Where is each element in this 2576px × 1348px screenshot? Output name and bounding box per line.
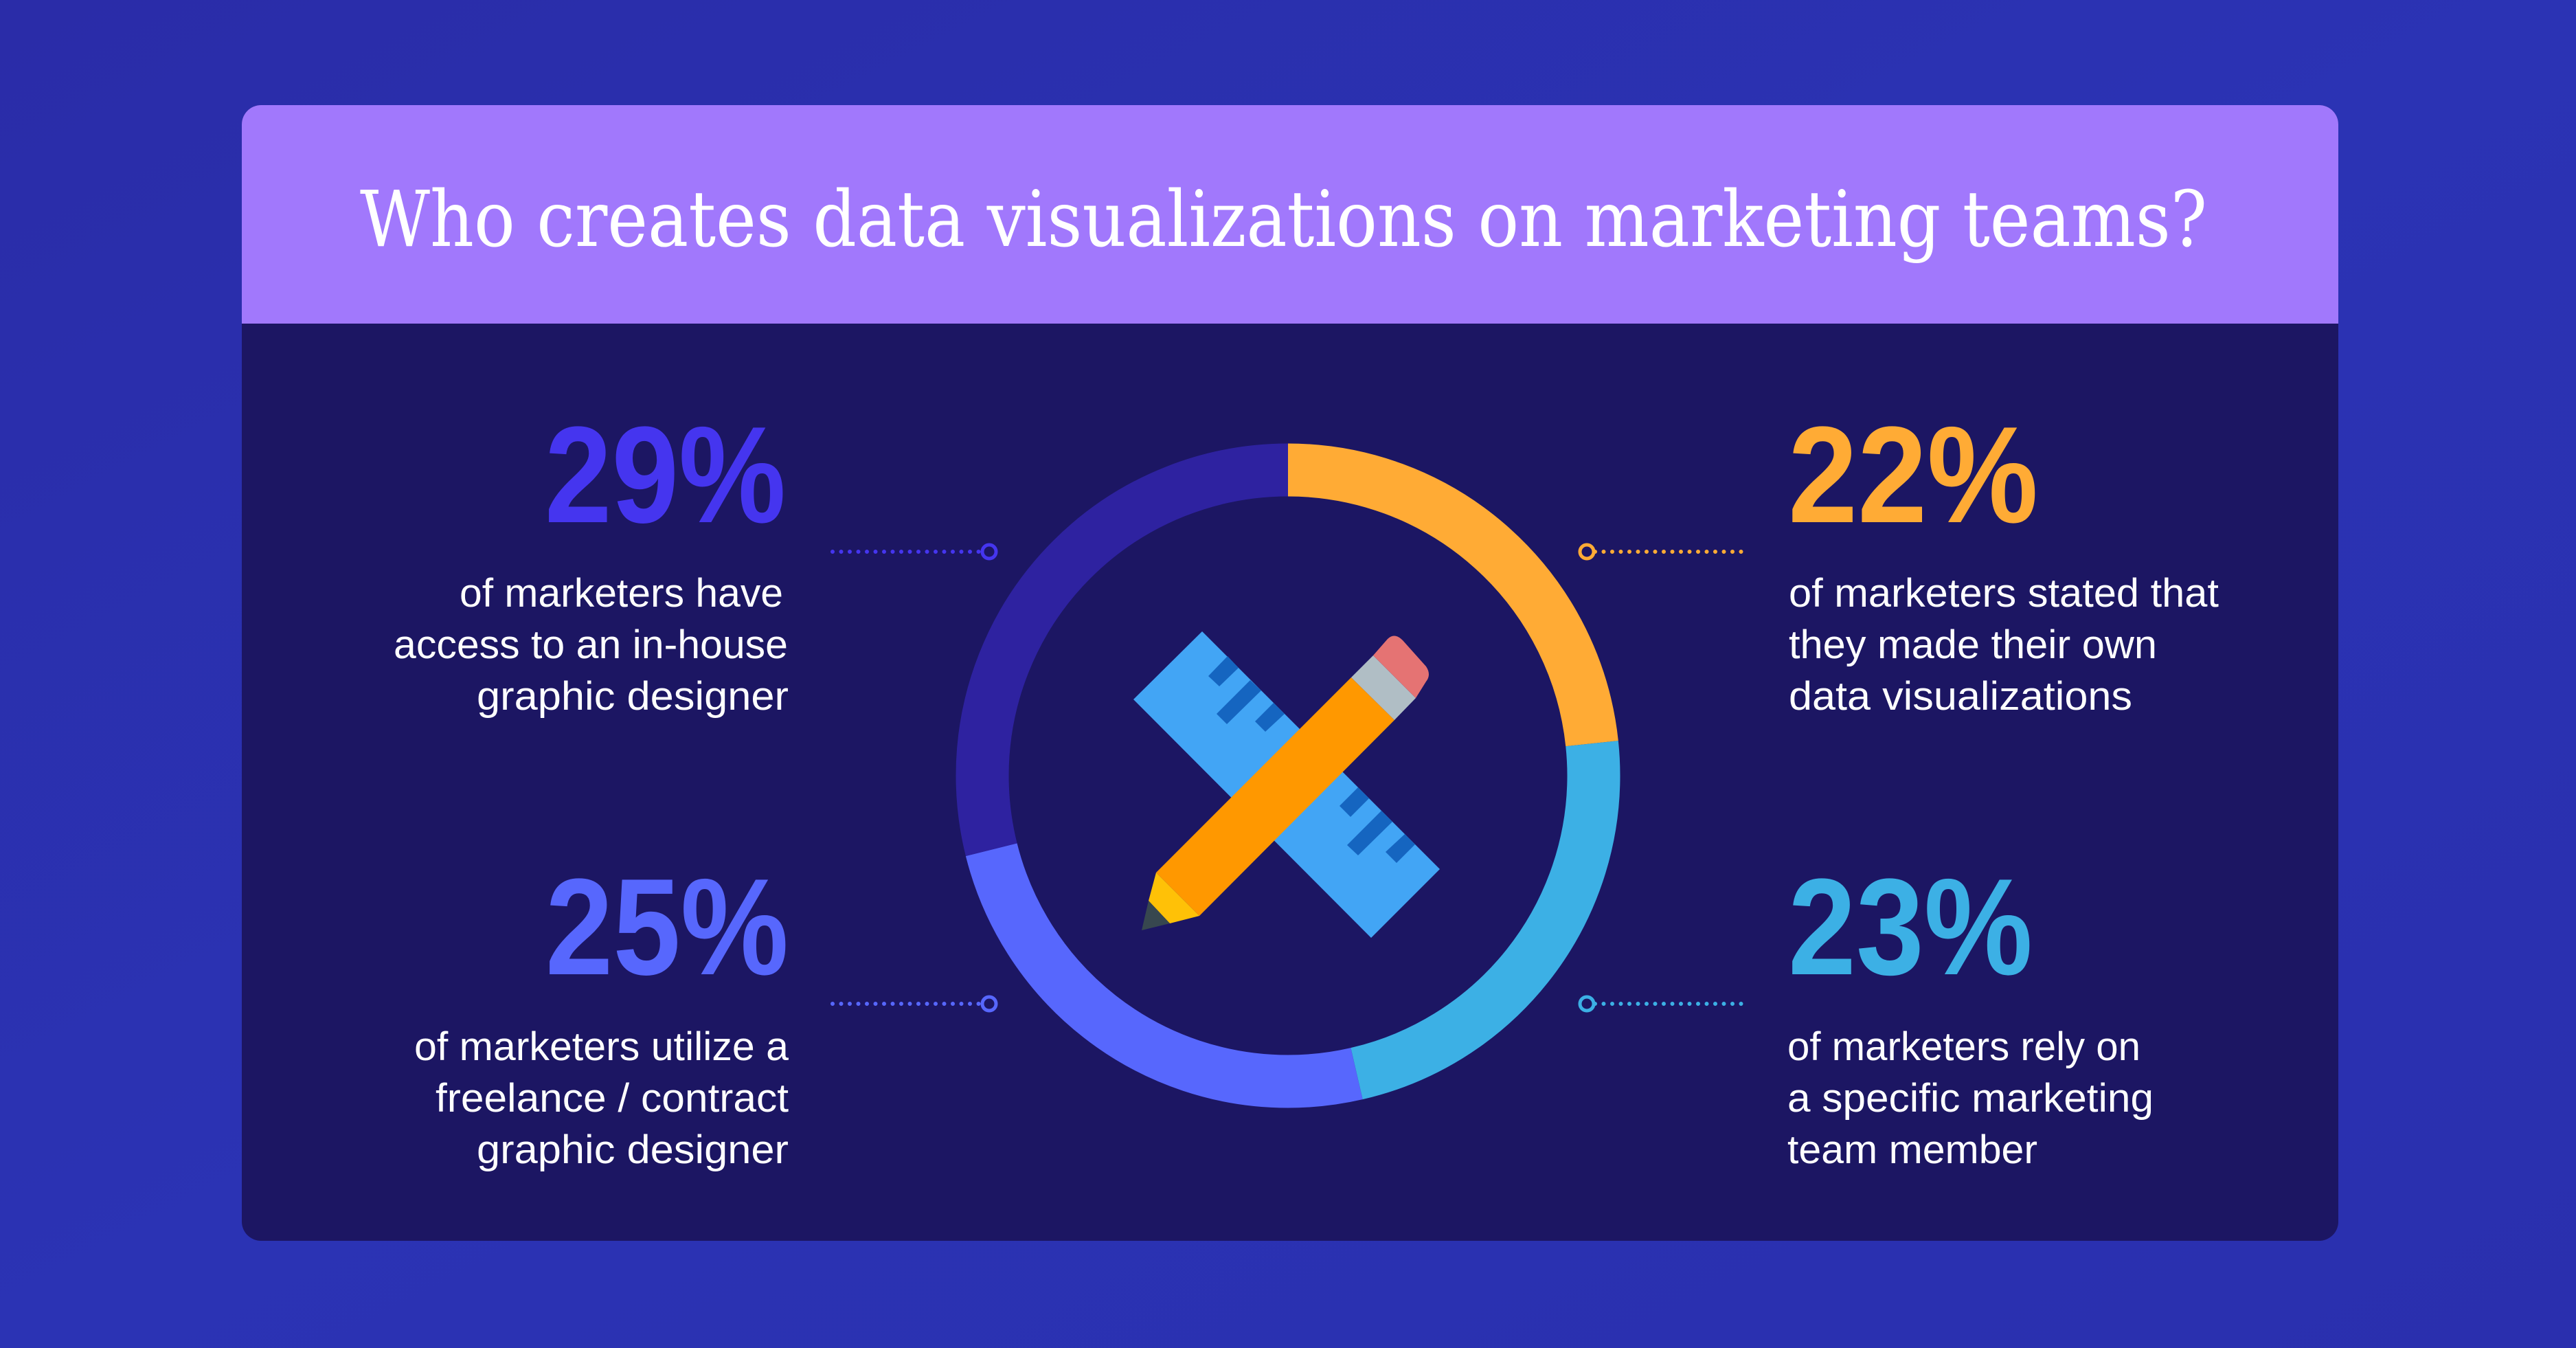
stat: 22%: they made their own xyxy=(1789,622,2157,667)
stat: 29% xyxy=(394,398,789,719)
donut chart xyxy=(982,470,1594,1081)
stat: 22%: of marketers stated that xyxy=(1789,571,2219,616)
stat: 22% xyxy=(1788,398,2219,719)
stat: 29%: of marketers have xyxy=(460,571,783,616)
stat: 25%: freelance / contract xyxy=(436,1076,789,1121)
stat: 23%: a specific marketing xyxy=(1787,1076,2154,1121)
stat: 23%: 23% xyxy=(1788,851,2033,1004)
icon: ruler and pencil xyxy=(1133,631,1440,938)
stat: 29%: access to an in-house xyxy=(394,622,788,667)
card xyxy=(242,105,2338,1241)
stat: 25%: 25% xyxy=(545,851,789,1004)
connector: 22% xyxy=(1580,545,1742,559)
header band xyxy=(242,105,2338,324)
icon: pencil xyxy=(1142,636,1429,930)
stat: 29%: 29% xyxy=(545,398,786,552)
stat: 23%: of marketers rely on xyxy=(1787,1024,2140,1069)
icon: ruler xyxy=(1133,631,1440,938)
connector: 25% xyxy=(833,997,996,1011)
stat: 23%: team member xyxy=(1787,1127,2037,1172)
connector: 29% xyxy=(833,545,996,559)
stat: 25%: of marketers utilize a xyxy=(414,1024,789,1069)
stat: 29%: graphic designer xyxy=(477,674,789,719)
stat: 22%: 22% xyxy=(1788,398,2038,552)
connector: 23% xyxy=(1580,997,1742,1011)
stat: 25% xyxy=(414,851,789,1172)
title: Who creates data visualizations on marketing teams? xyxy=(360,175,2207,265)
stat: 25%: graphic designer xyxy=(477,1127,789,1172)
stat: 22%: data visualizations xyxy=(1789,674,2132,719)
stat: 23% xyxy=(1787,851,2154,1172)
